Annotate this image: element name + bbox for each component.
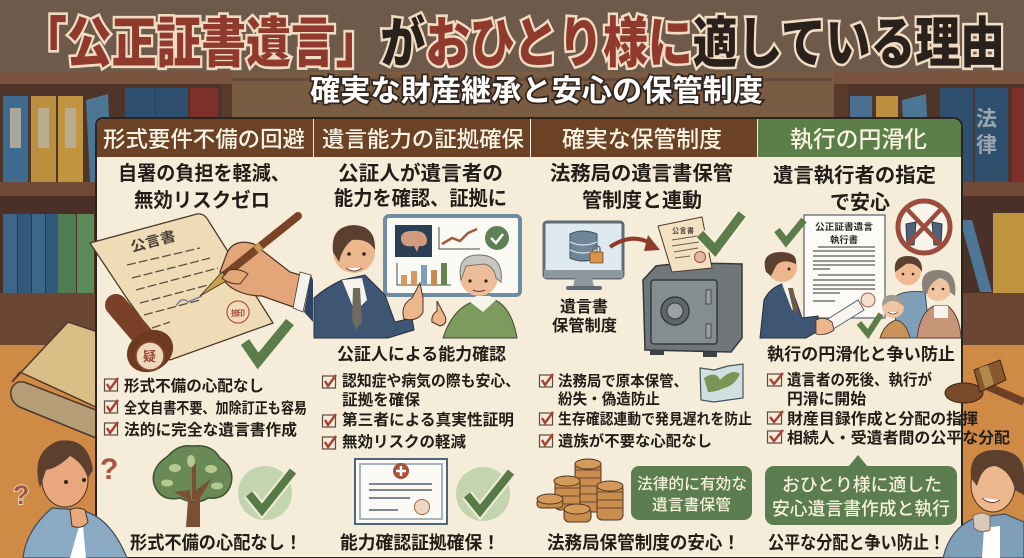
illustration: signing the notarial deed: 捺印 bbox=[231, 308, 245, 318]
checklist: 遺族が不要な心配なし bbox=[558, 432, 712, 450]
subtitle: 確実な財産継承と安心の保管制度 bbox=[310, 75, 763, 108]
header: 執行の円滑化 bbox=[758, 119, 961, 157]
illustration: safe bbox=[643, 263, 742, 357]
subheading bbox=[550, 162, 733, 212]
subheading: 管制度と連動 bbox=[582, 188, 702, 212]
icon: check mark bbox=[245, 322, 290, 361]
checklist: 無効リスクの軽減 bbox=[342, 433, 466, 451]
checklist: 執行の円滑化: 遺言者の死後、執行が bbox=[787, 370, 932, 389]
subheading: 自署の負担を軽減、 bbox=[118, 161, 290, 185]
header: 遺言能力の証拠確保: 遺言能力の証拠確保 bbox=[322, 127, 524, 152]
closing line: 能力確認証拠確保！ bbox=[340, 533, 500, 553]
bookshelf: right bbox=[834, 72, 1024, 345]
header: 執行の円滑化: 執行の円滑化 bbox=[790, 126, 927, 152]
bookshelf: left bbox=[0, 72, 232, 345]
checklist: 執行の円滑化: 財産目録作成と分配の指揮 bbox=[787, 409, 978, 428]
illustration: signing the notarial deed: 公言書 bbox=[129, 228, 177, 255]
illustration: certificate bbox=[355, 459, 447, 524]
illustration: wax seal stamp: 疑 bbox=[143, 349, 156, 364]
subheading: 公証人が遺言者の bbox=[338, 161, 503, 185]
callout: 法律的に有効な遺言書保管: 法律的に有効な bbox=[637, 475, 747, 493]
subheading: 執行の円滑化と争い防止: 執行の円滑化と争い防止 bbox=[767, 344, 955, 364]
icon: tree bbox=[153, 446, 232, 527]
illustration: happy man bbox=[943, 450, 1024, 558]
subheading: 能力を確認、証拠に bbox=[334, 187, 507, 210]
illustration: executor deed bbox=[804, 215, 885, 318]
illustration: executor deed: 公正証書遺言 bbox=[815, 221, 873, 232]
subheading bbox=[334, 161, 507, 210]
icon: check mark fill bbox=[700, 214, 742, 250]
callout: おひとり様に適した安心遺言書作成と執行: おひとり様に適した bbox=[782, 475, 942, 495]
checklist: 法的に完全な遺言書作成 bbox=[124, 420, 297, 439]
closed book on table bbox=[11, 322, 98, 438]
checklist: 形式不備の心配なし bbox=[124, 377, 264, 395]
illustration: notary bbox=[314, 225, 423, 338]
illustration: worried man with question marks: ? bbox=[100, 453, 118, 486]
callout: おひとり様に適した安心遺言書作成と執行: 安心遺言書作成と執行 bbox=[772, 499, 950, 519]
illustration: computer with database bbox=[544, 222, 623, 290]
illustration: elderly client bbox=[432, 255, 517, 338]
subheading: 無効リスクゼロ bbox=[134, 188, 270, 212]
checklist: 全文自書不要、加除訂正も容易 bbox=[124, 399, 307, 417]
callout: 法律的に有効な遺言書保管 bbox=[631, 466, 752, 520]
label: 遺言書保管制度: 遺言書 bbox=[560, 297, 608, 316]
checklist: 執行の円滑化: 円滑に開始 bbox=[787, 390, 866, 408]
illustration: deed entering safe: 公言書 bbox=[672, 226, 694, 235]
closing line: 形式不備の心配なし！ bbox=[130, 533, 302, 553]
header: 遺言能力の証拠確保 bbox=[314, 119, 530, 157]
checklist: 紛失・偽造防止 bbox=[558, 390, 660, 408]
checklist: 生存確認連動で発見遅れを防止 bbox=[558, 410, 752, 428]
book spine label: right shelf lower: 律 bbox=[976, 134, 997, 157]
panel: 確実な保管制度 bbox=[531, 119, 757, 553]
subheading: 遺言執行者の指定 bbox=[773, 164, 936, 187]
checklist bbox=[104, 377, 307, 439]
checklist bbox=[540, 372, 752, 450]
label: 遺言書保管制度 bbox=[552, 297, 617, 335]
callout: おひとり様に適した安心遺言書作成と執行 bbox=[765, 455, 957, 525]
callout: 法律的に有効な遺言書保管: 遺言書保管 bbox=[652, 496, 731, 514]
illustration: worried man with question marks bbox=[13, 440, 127, 558]
subheading: で安心 bbox=[830, 191, 890, 214]
panel: 執行の円滑化 bbox=[758, 119, 961, 364]
subheading: 法務局の遺言書保管 bbox=[550, 162, 733, 185]
checklist: 法務局で原本保管、 bbox=[558, 372, 688, 390]
gavel bbox=[945, 360, 1024, 403]
illustration: family bbox=[880, 256, 961, 338]
checklist: 執行の円滑化: 相続人・受遺者間の公平な分配 bbox=[787, 428, 1010, 447]
checklist: 第三者による真実性証明 bbox=[342, 410, 514, 429]
closing line: 法務局保管制度の安心！ bbox=[547, 532, 740, 553]
icon: check mark bbox=[700, 214, 742, 250]
illustration: worried man with question marks: ? bbox=[13, 480, 30, 510]
illustration: presentation screen bbox=[385, 216, 520, 295]
icon: prohibited dispute bbox=[898, 201, 950, 253]
icon: check mark bbox=[859, 314, 881, 334]
checklist: 証拠を確保 bbox=[342, 390, 420, 409]
illustration: signing the notarial deed bbox=[90, 214, 313, 360]
header: 形式要件不備の回避: 形式要件不備の回避 bbox=[103, 127, 305, 152]
icon: map bbox=[700, 364, 743, 402]
panel board bbox=[96, 118, 962, 558]
checklist: 認知症や病気の際も安心、 bbox=[342, 371, 520, 390]
header: 形式要件不備の回避 bbox=[97, 119, 313, 157]
title: 「公正証書遺言」がおひとり様に適している理由 bbox=[22, 12, 1005, 74]
illustration: wax seal stamp bbox=[116, 305, 181, 380]
illustration: executor deed: 執行書 bbox=[830, 234, 858, 245]
label: 遺言書保管制度: 保管制度 bbox=[552, 316, 617, 335]
panel: 形式要件不備の回避 bbox=[90, 119, 313, 553]
checklist: 執行の円滑化 bbox=[768, 370, 1010, 447]
subheading: 公証人による能力確認: 公証人による能力確認 bbox=[337, 344, 506, 364]
icon: check mark bbox=[777, 220, 804, 242]
icon: green check badge bbox=[456, 467, 511, 521]
header: 確実な保管制度: 確実な保管制度 bbox=[562, 126, 722, 152]
checklist bbox=[322, 371, 520, 451]
illustration: notary handing deed bbox=[760, 252, 864, 338]
icon: green check badge bbox=[238, 466, 293, 520]
book spine label: right shelf: 法 bbox=[976, 108, 997, 131]
icon: coin stacks bbox=[537, 459, 623, 522]
arrow: to safe bbox=[610, 235, 660, 251]
illustration: deed entering safe bbox=[658, 217, 712, 272]
subheading bbox=[118, 161, 290, 212]
closing line: 公平な分配と争い防止！ bbox=[768, 533, 945, 553]
subheading bbox=[773, 164, 936, 214]
header: 確実な保管制度 bbox=[531, 119, 757, 157]
panel: 遺言能力の証拠確保 bbox=[314, 119, 530, 553]
